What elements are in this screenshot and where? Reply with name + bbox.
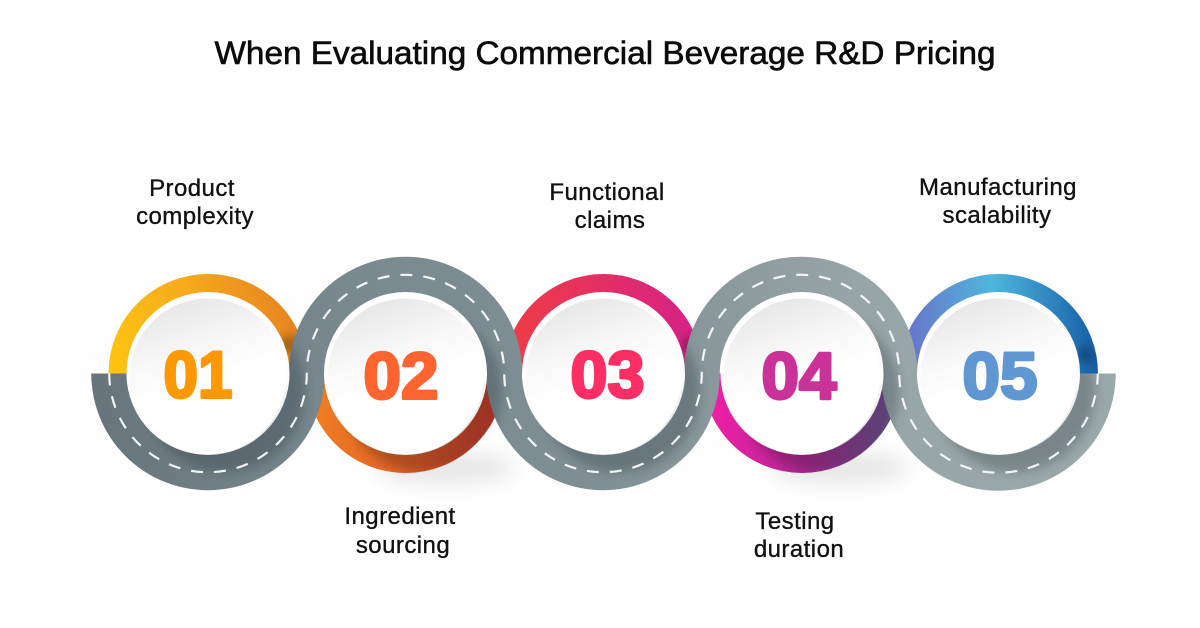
road [109,275,1098,473]
ground shadows [375,452,910,484]
ring shading [280,312,1093,472]
label: product complexity [136,175,254,230]
step 04 disc: 04 [762,338,837,412]
step 03 disc: 03 [570,338,644,412]
road lane dashes [109,275,1098,473]
label: testing duration: Testing [755,508,835,535]
coloured rings [118,284,1088,463]
title: When Evaluating Commercial Beverage R&D Pricing [214,35,996,71]
label: testing duration: duration [754,536,844,563]
label: manufacturing scalability: Manufacturing [919,174,1077,201]
label: functional claims: claims [575,207,645,234]
label: ingredient sourcing: sourcing [356,532,450,559]
step 05 disc: 05 [962,338,1038,412]
label: testing duration [754,508,844,563]
step 04 disc [720,292,884,455]
label: ingredient sourcing [344,503,456,559]
label: product complexity: complexity [136,203,254,230]
step 01 disc: 01 [164,338,232,412]
label: ingredient sourcing: Ingredient [344,503,456,530]
label: manufacturing scalability [919,174,1077,229]
road shading [145,312,1095,472]
label: functional claims [549,179,665,234]
step 02 disc: 02 [364,338,438,412]
step 03 disc [522,292,685,455]
label: product complexity: Product [149,175,235,202]
step 05 disc [917,292,1080,455]
step 01 disc [126,292,290,455]
label: functional claims: Functional [549,179,665,206]
label: manufacturing scalability: scalability [942,202,1052,229]
step 02 disc [324,292,487,455]
